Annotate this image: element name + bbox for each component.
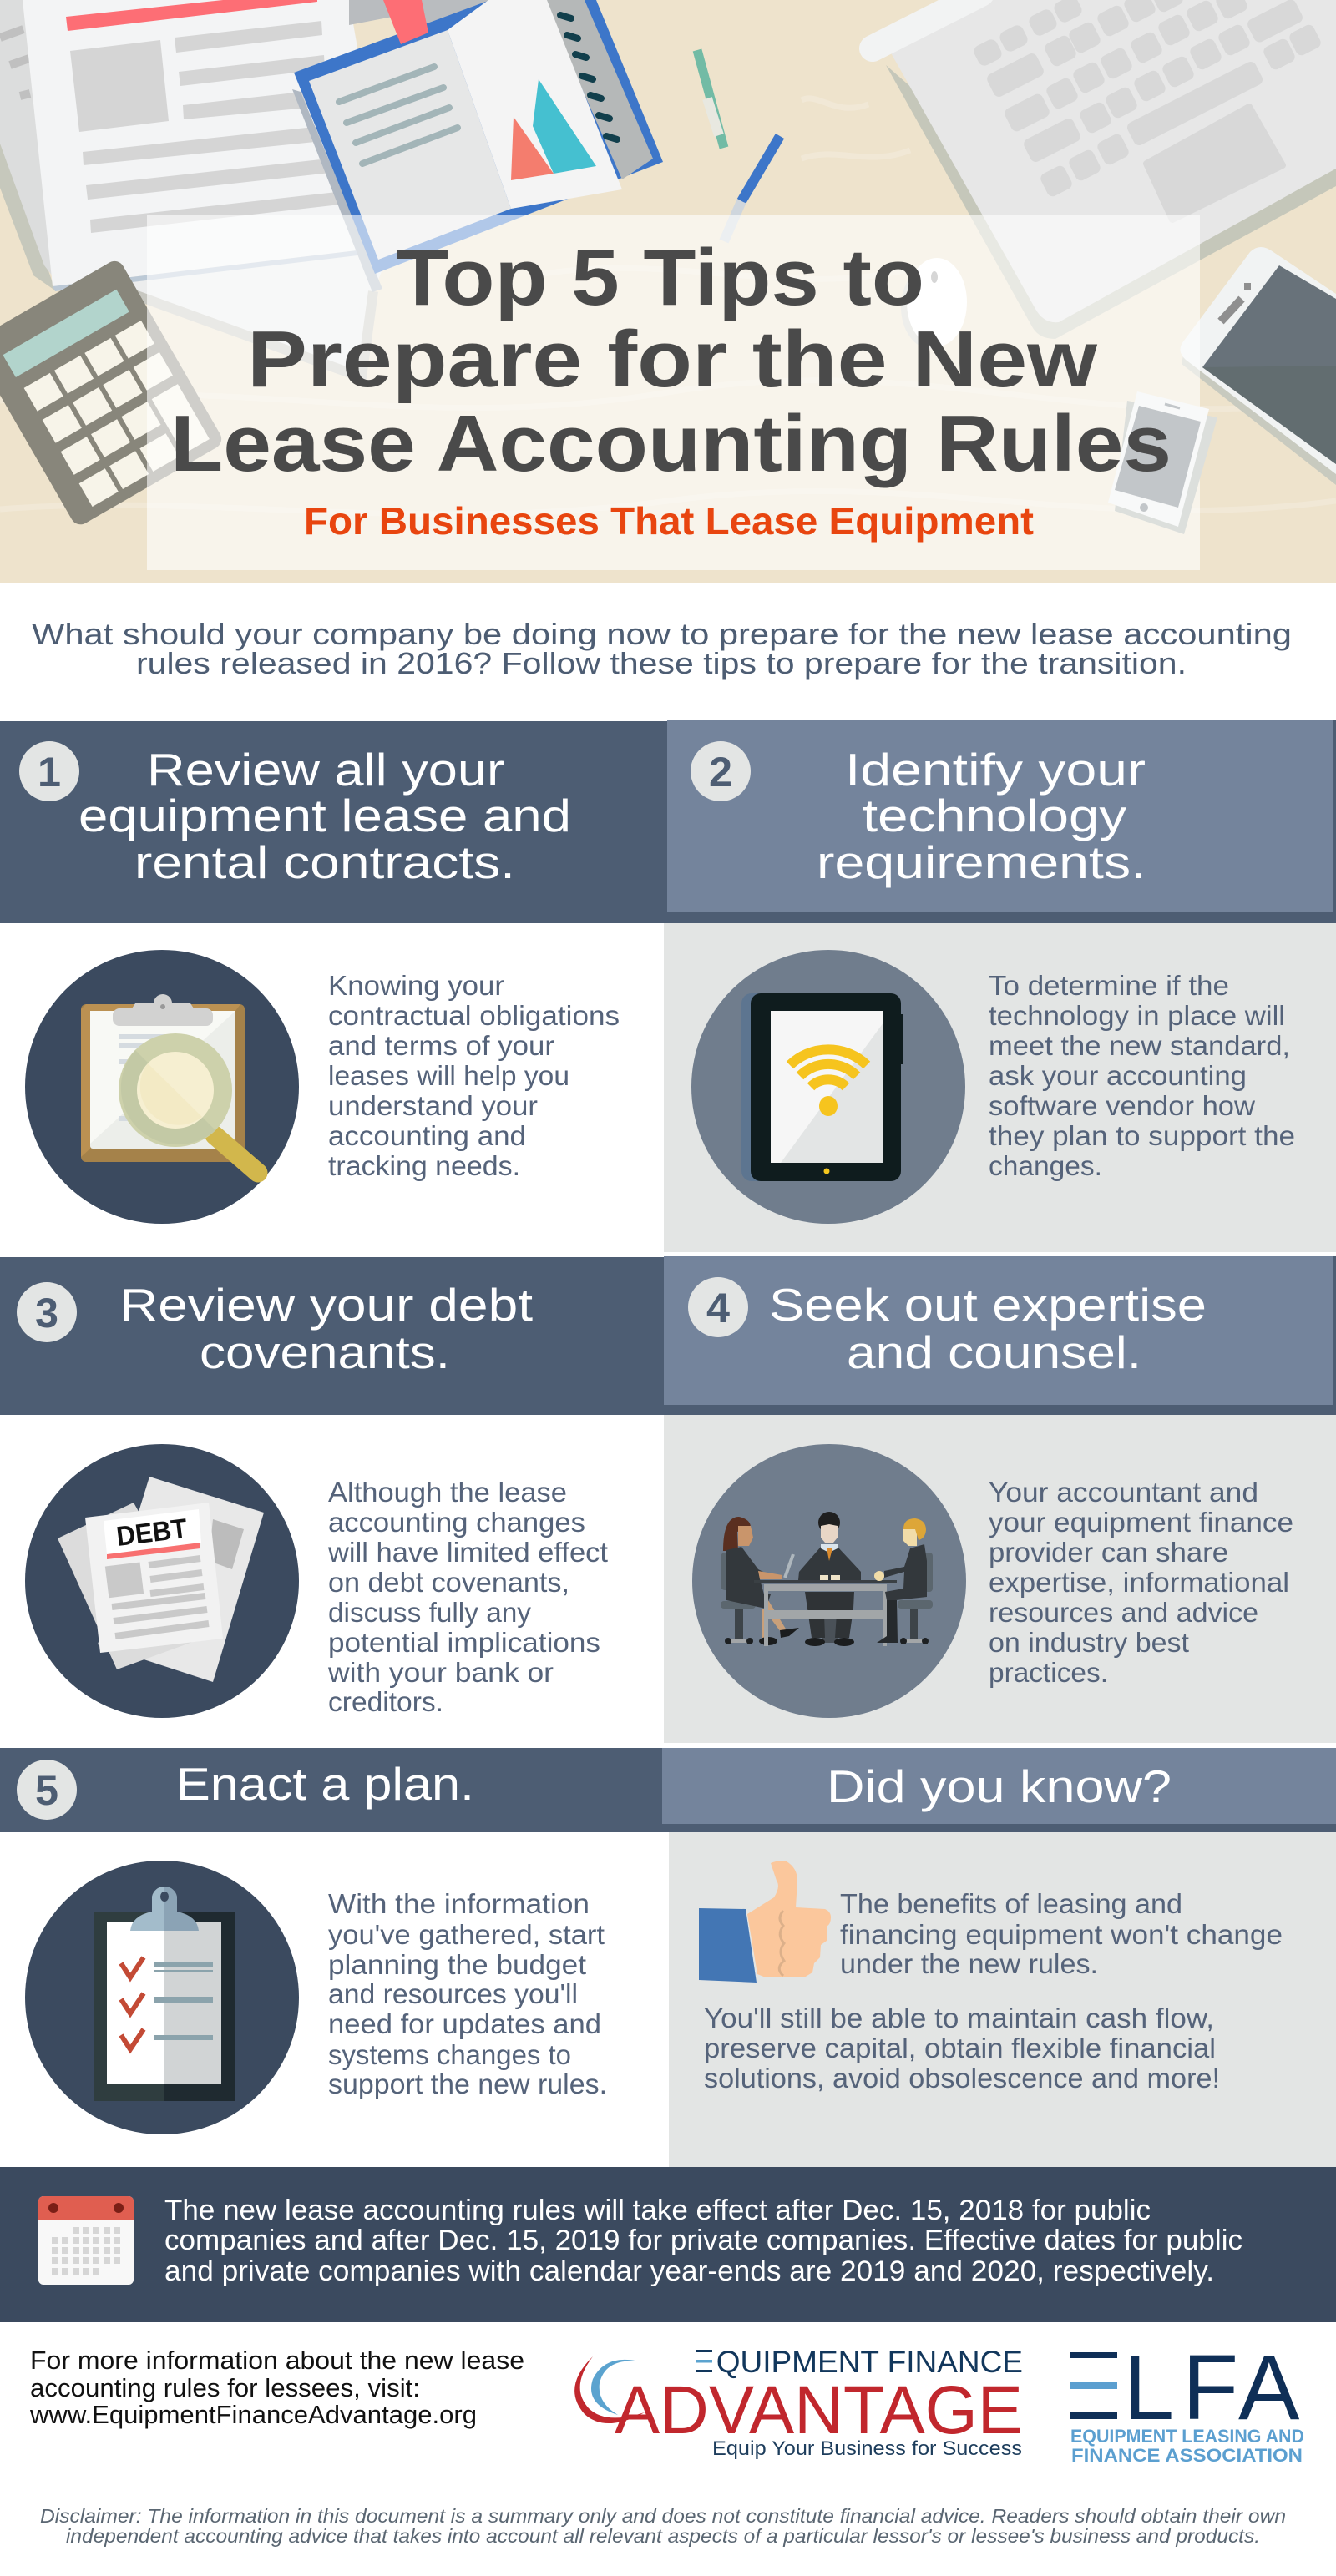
panel: effective dates banner: and private companies with calendar year-ends are 2019 and 2020, respectively.	[164, 2255, 1214, 2287]
icon: tablet with wifi	[691, 950, 965, 1224]
panel: tip 4 header: and counsel.	[847, 1326, 1141, 1378]
footer: more information: For more information about the new lease	[30, 2346, 524, 2375]
text: tip 2: software vendor how	[989, 1090, 1255, 1121]
panel: tip 4 header	[664, 1256, 1336, 1415]
panel: tip 2 header: Identify your	[845, 744, 1146, 796]
text: tip 3: potential implications	[328, 1627, 600, 1658]
text: tip 3: accounting changes	[328, 1507, 585, 1538]
icon: debt papers: DEBT	[114, 1513, 189, 1552]
text: did you know: preserve capital, obtain flexible financial	[704, 2033, 1216, 2063]
left person and chair	[721, 1517, 799, 1645]
panel: did you know background	[669, 1832, 1336, 2167]
text: tip 5: support the new rules.	[328, 2068, 607, 2099]
text: did you know: The benefits of leasing and	[840, 1888, 1182, 1919]
icon: checklist clipboard	[25, 1861, 299, 2134]
panel: tip 5 header: 5	[35, 1767, 58, 1814]
text: tip 1: and terms of your	[328, 1030, 554, 1061]
panel: tip 1 header: Review all your	[147, 744, 504, 796]
text: tip 4: on industry best	[989, 1627, 1189, 1658]
panel: tip 3 header: covenants.	[200, 1326, 450, 1378]
text: did you know: financing equipment won't change	[840, 1919, 1283, 1950]
panel: tip 2 background	[664, 923, 1336, 1252]
logo: Equipment Finance Advantage: ADVANTAGE	[615, 2372, 1023, 2448]
blue pen	[724, 136, 780, 241]
panel: did you know header: Did you know?	[827, 1760, 1172, 1812]
green pen	[697, 50, 724, 148]
back papers	[0, 0, 58, 290]
text: did you know: solutions, avoid obsolescence and more!	[704, 2063, 1220, 2094]
intro text	[32, 617, 1292, 680]
icon: debt papers	[25, 1444, 299, 1718]
panel: effective dates banner: The new lease accounting rules will take effect after Dec. 15, 2018 for public	[164, 2195, 1151, 2226]
intro text: What should your company be doing now to prepare for the new lease accounting	[32, 617, 1292, 651]
text: tip 3: Although the lease	[328, 1477, 567, 1508]
text: tip 2: changes.	[989, 1150, 1102, 1181]
text: tip 1: Knowing your	[328, 970, 504, 1001]
text: tip 4: expertise, informational	[989, 1567, 1289, 1598]
panel: tip 4 header: 4	[706, 1285, 730, 1331]
text: tip 2: ask your accounting	[989, 1060, 1247, 1091]
icon: thumbs up	[699, 1861, 831, 1983]
text: did you know: You'll still be able to maintain cash flow,	[704, 2003, 1214, 2033]
text: tip 1: leases will help you	[328, 1060, 569, 1091]
text: tip 5: need for updates and	[328, 2008, 601, 2039]
table	[754, 1580, 897, 1646]
title: Prepare for the New	[247, 315, 1097, 404]
text: tip 2: technology in place will	[989, 1000, 1285, 1031]
subtitle: For Businesses That Lease Equipment	[304, 499, 1034, 543]
text: tip 4	[989, 1477, 1293, 1688]
logo: ELFA: FINANCE ASSOCIATION	[1071, 2445, 1303, 2466]
disclaimer	[40, 2505, 1286, 2547]
logo: Equipment Finance Advantage: Equip Your Business for Success	[712, 2437, 1022, 2460]
panel: tip 1 header: 1	[38, 749, 61, 796]
panel: tip 3 header: 3	[35, 1290, 58, 1336]
text: tip 5: With the information	[328, 1888, 590, 1919]
text: tip 3: with your bank or	[327, 1657, 554, 1688]
small phone	[1108, 391, 1217, 534]
text: tip 5: and resources you'll	[328, 1978, 578, 2009]
panel: tip 1 header: rental contracts.	[134, 836, 515, 888]
text: did you know: under the new rules.	[840, 1948, 1098, 1979]
icon: clipboard and magnifier	[25, 950, 299, 1224]
text: tip 3: discuss fully any	[328, 1597, 532, 1628]
large phone	[1180, 247, 1336, 485]
text: tip 3: on debt covenants,	[328, 1567, 569, 1598]
panel: tip 3 header: Review your debt	[119, 1279, 533, 1331]
text: tip 1: contractual obligations	[328, 1000, 620, 1031]
panel: tip 5 header: Enact a plan.	[176, 1758, 474, 1810]
notebook	[292, 0, 663, 292]
text: tip 1: understand your	[328, 1090, 538, 1121]
paper shadow below front sheet	[132, 255, 382, 380]
text: tip 5: planning the budget	[328, 1949, 586, 1980]
text: tip 1	[328, 970, 620, 1181]
text: tip 2: meet the new standard,	[989, 1030, 1290, 1061]
text: tip 3: creditors.	[328, 1686, 443, 1717]
text: did you know	[704, 1888, 1283, 2094]
panel: did you know header	[662, 1748, 1336, 1832]
text: tip 1: accounting and	[328, 1120, 526, 1151]
logo: Equipment Finance Advantage	[574, 2345, 1023, 2460]
text: tip 1: tracking needs.	[328, 1150, 520, 1181]
front paper with text lines	[23, 0, 392, 291]
text: tip 5	[328, 1888, 607, 2099]
text: tip 4: provider can share	[989, 1537, 1228, 1568]
text: tip 5: you've gathered, start	[328, 1919, 605, 1950]
panel: tip 2 header: requirements.	[817, 836, 1146, 888]
text: tip 2: they plan to support the	[989, 1120, 1295, 1151]
panel: tip 2 header: 2	[709, 749, 732, 796]
text: tip 4: practices.	[989, 1657, 1108, 1688]
panel: tip 1 header: equipment lease and	[78, 790, 571, 841]
calculator	[0, 257, 225, 528]
title: Top 5 Tips to	[396, 233, 924, 322]
panel: tip 3 header	[0, 1257, 664, 1415]
text: tip 3: will have limited effect	[327, 1537, 608, 1568]
panel: effective dates banner: companies and after Dec. 15, 2019 for private companies. Effective dates for public	[164, 2225, 1242, 2256]
intro text: rules released in 2016? Follow these tips to prepare for the transition.	[136, 646, 1187, 680]
text: tip 4: your equipment finance	[989, 1507, 1293, 1538]
middle person	[798, 1512, 861, 1646]
footer: more information: accounting rules for lessees, visit:	[30, 2373, 420, 2402]
laptop	[873, 0, 1336, 339]
hero: desk illustration	[0, 0, 1336, 583]
title panel	[147, 215, 1200, 570]
footer: more information	[29, 2346, 524, 2429]
panel: tip 2 header: technology	[863, 790, 1127, 841]
disclaimer: Disclaimer: The information in this document is a summary only and does not constitute financial advice. Readers should obtain their own	[40, 2505, 1286, 2527]
icon: meeting people	[692, 1444, 966, 1718]
text: tip 4: Your accountant and	[989, 1477, 1258, 1508]
right person and chair	[874, 1518, 933, 1644]
panel: tip 2 header	[667, 720, 1336, 923]
mouse	[901, 258, 967, 349]
disclaimer: independent accounting advice that takes into account all relevant aspects of a particular lessor's or lessee's business and products.	[66, 2525, 1260, 2547]
text: tip 2: To determine if the	[989, 970, 1229, 1001]
text: tip 5: systems changes to	[328, 2039, 571, 2070]
panel: tip 4 header: Seek out expertise	[769, 1279, 1207, 1331]
panel: effective dates banner	[0, 2167, 1336, 2322]
text: tip 4: resources and advice	[989, 1597, 1258, 1628]
panel: tip 5 header	[0, 1748, 662, 1832]
title	[170, 233, 1172, 488]
text: tip 2	[989, 970, 1295, 1181]
icon: calendar	[38, 2196, 134, 2285]
logo: ELFA: EQUIPMENT LEASING AND	[1070, 2426, 1304, 2447]
panel: tip 4 background	[664, 1415, 1336, 1743]
text: tip 3	[327, 1477, 608, 1717]
title: Lease Accounting Rules	[170, 399, 1172, 488]
footer: more information: www.EquipmentFinanceAdvantage.org	[29, 2400, 477, 2429]
panel: tip 1 header	[0, 721, 667, 923]
